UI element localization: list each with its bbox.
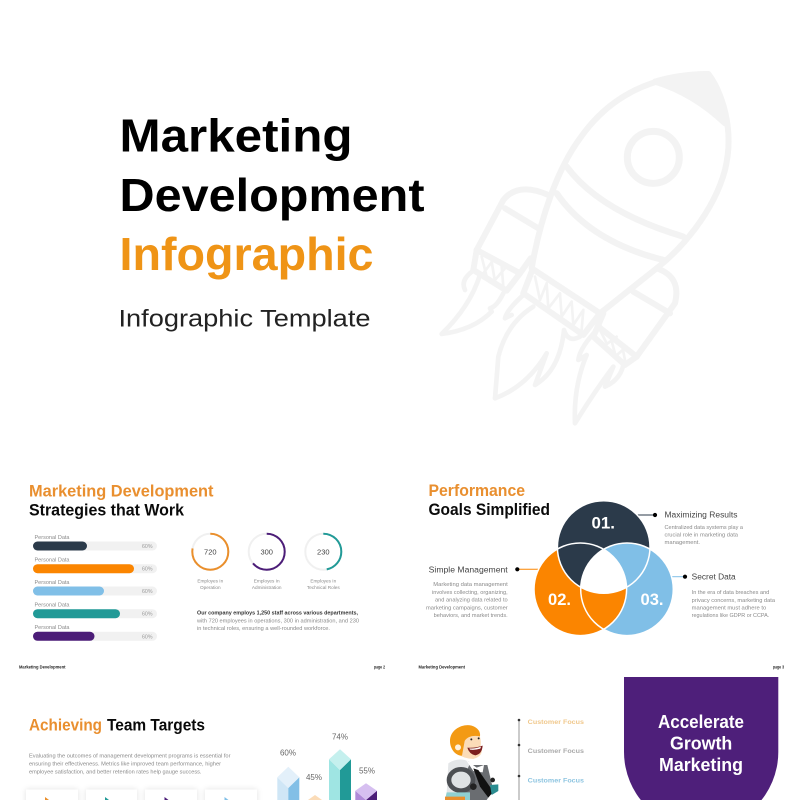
timeline: customer focus (518, 719, 584, 800)
chart: ring 230: Technical Roles (307, 585, 340, 590)
text block: simple management: behaviors, and market trends. (434, 613, 508, 619)
chart: ring 230 (305, 534, 341, 590)
connector: left (517, 568, 540, 570)
footer: slide 3 (418, 664, 784, 670)
bar chart: personal data: Personal Data (34, 535, 70, 541)
callout: accelerate growth marketing: Accelerate (658, 711, 744, 732)
connector: top right (630, 514, 655, 516)
text block: staff summary: Our company employs 1,250 staff across various departments, (197, 610, 358, 616)
text block: simple management: Marketing data management (433, 582, 508, 588)
text block: evaluation summary: employee satisfaction, and better retention rates help gauge success. (29, 770, 202, 776)
text block: staff summary (196, 610, 359, 632)
bar chart: isometric columns: 55% (359, 766, 375, 776)
panel: slide 4 team targets (26, 716, 377, 800)
timeline: customer focus: Customer Focus (528, 778, 584, 785)
panel: slide 3 performance venn (418, 481, 784, 670)
bar chart: personal data: 60% (142, 634, 153, 640)
dot: left (515, 567, 519, 571)
bar chart: isometric columns: 45% (306, 773, 322, 782)
bar chart: personal data: Personal Data (34, 625, 70, 631)
title: main heading: Infographic (120, 228, 374, 280)
bar chart: personal data: 60% (142, 612, 153, 618)
heading: performance (428, 481, 550, 519)
text block: simple management: and analyzing data related to (435, 598, 508, 604)
heading: achieving team targets: Team Targets (107, 716, 205, 735)
timeline: customer focus: Customer Focus (528, 719, 584, 726)
text block: secret data (692, 572, 775, 619)
text block: secret data: Secret Data (692, 572, 736, 582)
text block: secret data: management must adhere to (692, 605, 766, 611)
callout: accelerate growth marketing: Growth (670, 732, 732, 754)
text block: simple management: marketing campaigns, customer (426, 605, 508, 611)
text block: maximizing results: management. (664, 540, 700, 546)
chart: venn diagram (534, 501, 673, 636)
callout: accelerate growth marketing (624, 677, 778, 800)
illustration: character with jetpack (445, 725, 498, 800)
text block: maximizing results: Centralized data systems play a (664, 525, 743, 531)
text block: simple management: Simple Management (429, 566, 509, 574)
callout: accelerate growth marketing: Marketing (659, 754, 743, 775)
text block: secret data: In the era of data breaches and (692, 590, 769, 596)
heading: performance: Performance (428, 481, 525, 500)
chart: ring 230: 230 (317, 548, 330, 556)
chart: ring 720: Employes In (197, 579, 224, 584)
chart: ring 300 (249, 534, 285, 590)
chart: ring 720 (192, 534, 228, 590)
timeline: customer focus: Customer Focus (528, 748, 584, 755)
heading: strategies: Strategies that Work (29, 500, 185, 520)
icon: faint rocket background (442, 74, 729, 423)
text block: simple management (426, 566, 509, 619)
heading: achieving team targets: Achieving (29, 716, 102, 735)
text block: secret data: privacy concerns, marketing data (692, 598, 775, 604)
text block: secret data: regulations like GDPR or CCPA. (692, 613, 769, 619)
footer: slide 2: page 2 (374, 664, 385, 670)
title: main heading: Development (120, 169, 424, 221)
bar chart: isometric columns (277, 733, 377, 800)
connector: right (670, 576, 685, 578)
chart: venn diagram: 03. (640, 590, 664, 609)
panel: slide 2 strategies (19, 482, 385, 670)
bar chart: isometric columns: 60% (280, 748, 296, 758)
chart: venn diagram: 01. (592, 513, 615, 532)
dot: right (683, 575, 687, 579)
bar chart: personal data: 60% (142, 589, 153, 595)
chart: venn diagram: 02. (548, 590, 571, 609)
text block: staff summary: in technical roles, ensuring a well-rounded workforce. (197, 626, 330, 632)
text block: maximizing results: Maximizing Results (664, 510, 738, 520)
chart: ring 300: 300 (260, 548, 273, 556)
chart: ring 300: Employes In (254, 579, 280, 584)
heading: strategies (29, 482, 214, 520)
text block: evaluation summary: Evaluating the outcomes of management development programs is essential for (29, 754, 231, 760)
bar chart: isometric columns: 74% (332, 733, 348, 742)
text block: simple management: involves collecting, organizing, (432, 590, 508, 596)
text block: evaluation summary (29, 754, 231, 776)
heading: strategies: Marketing Development (29, 482, 214, 500)
title: main heading (120, 110, 424, 280)
panel: slide 5 customer focus (445, 677, 778, 800)
bar chart: personal data (33, 535, 157, 641)
cards: play icons (26, 790, 257, 800)
text block: maximizing results (664, 510, 743, 546)
footer: slide 3: Marketing Development (418, 664, 465, 670)
text block: staff summary: with 720 employees in operations, 300 in administration, and 230 (196, 618, 359, 624)
heading: performance: Goals Simplified (428, 500, 550, 519)
text block: maximizing results: crucial role in marketing data (664, 532, 738, 538)
dot: top right (653, 513, 657, 517)
footer: slide 3: page 3 (773, 664, 784, 670)
bar chart: personal data: Personal Data (34, 558, 70, 564)
chart: ring 720: Operation (200, 585, 221, 590)
bar chart: personal data: Personal Data (34, 602, 70, 608)
bar chart: personal data: Personal Data (34, 580, 70, 586)
subtitle: Infographic Template (118, 306, 370, 333)
heading: achieving team targets (29, 716, 205, 735)
title: main heading: Marketing (120, 110, 352, 162)
bar chart: personal data: 60% (142, 544, 153, 550)
chart: ring 230: Employes In (310, 579, 337, 584)
chart: ring 720: 720 (204, 548, 217, 556)
bar chart: personal data: 60% (142, 567, 153, 573)
chart: ring 300: Administration (252, 585, 282, 590)
text block: evaluation summary: ensuring their effectiveness. Metrics like improved team performance, higher (29, 762, 221, 768)
footer: slide 2: Marketing Development (19, 664, 66, 670)
footer: slide 2 (19, 664, 385, 670)
